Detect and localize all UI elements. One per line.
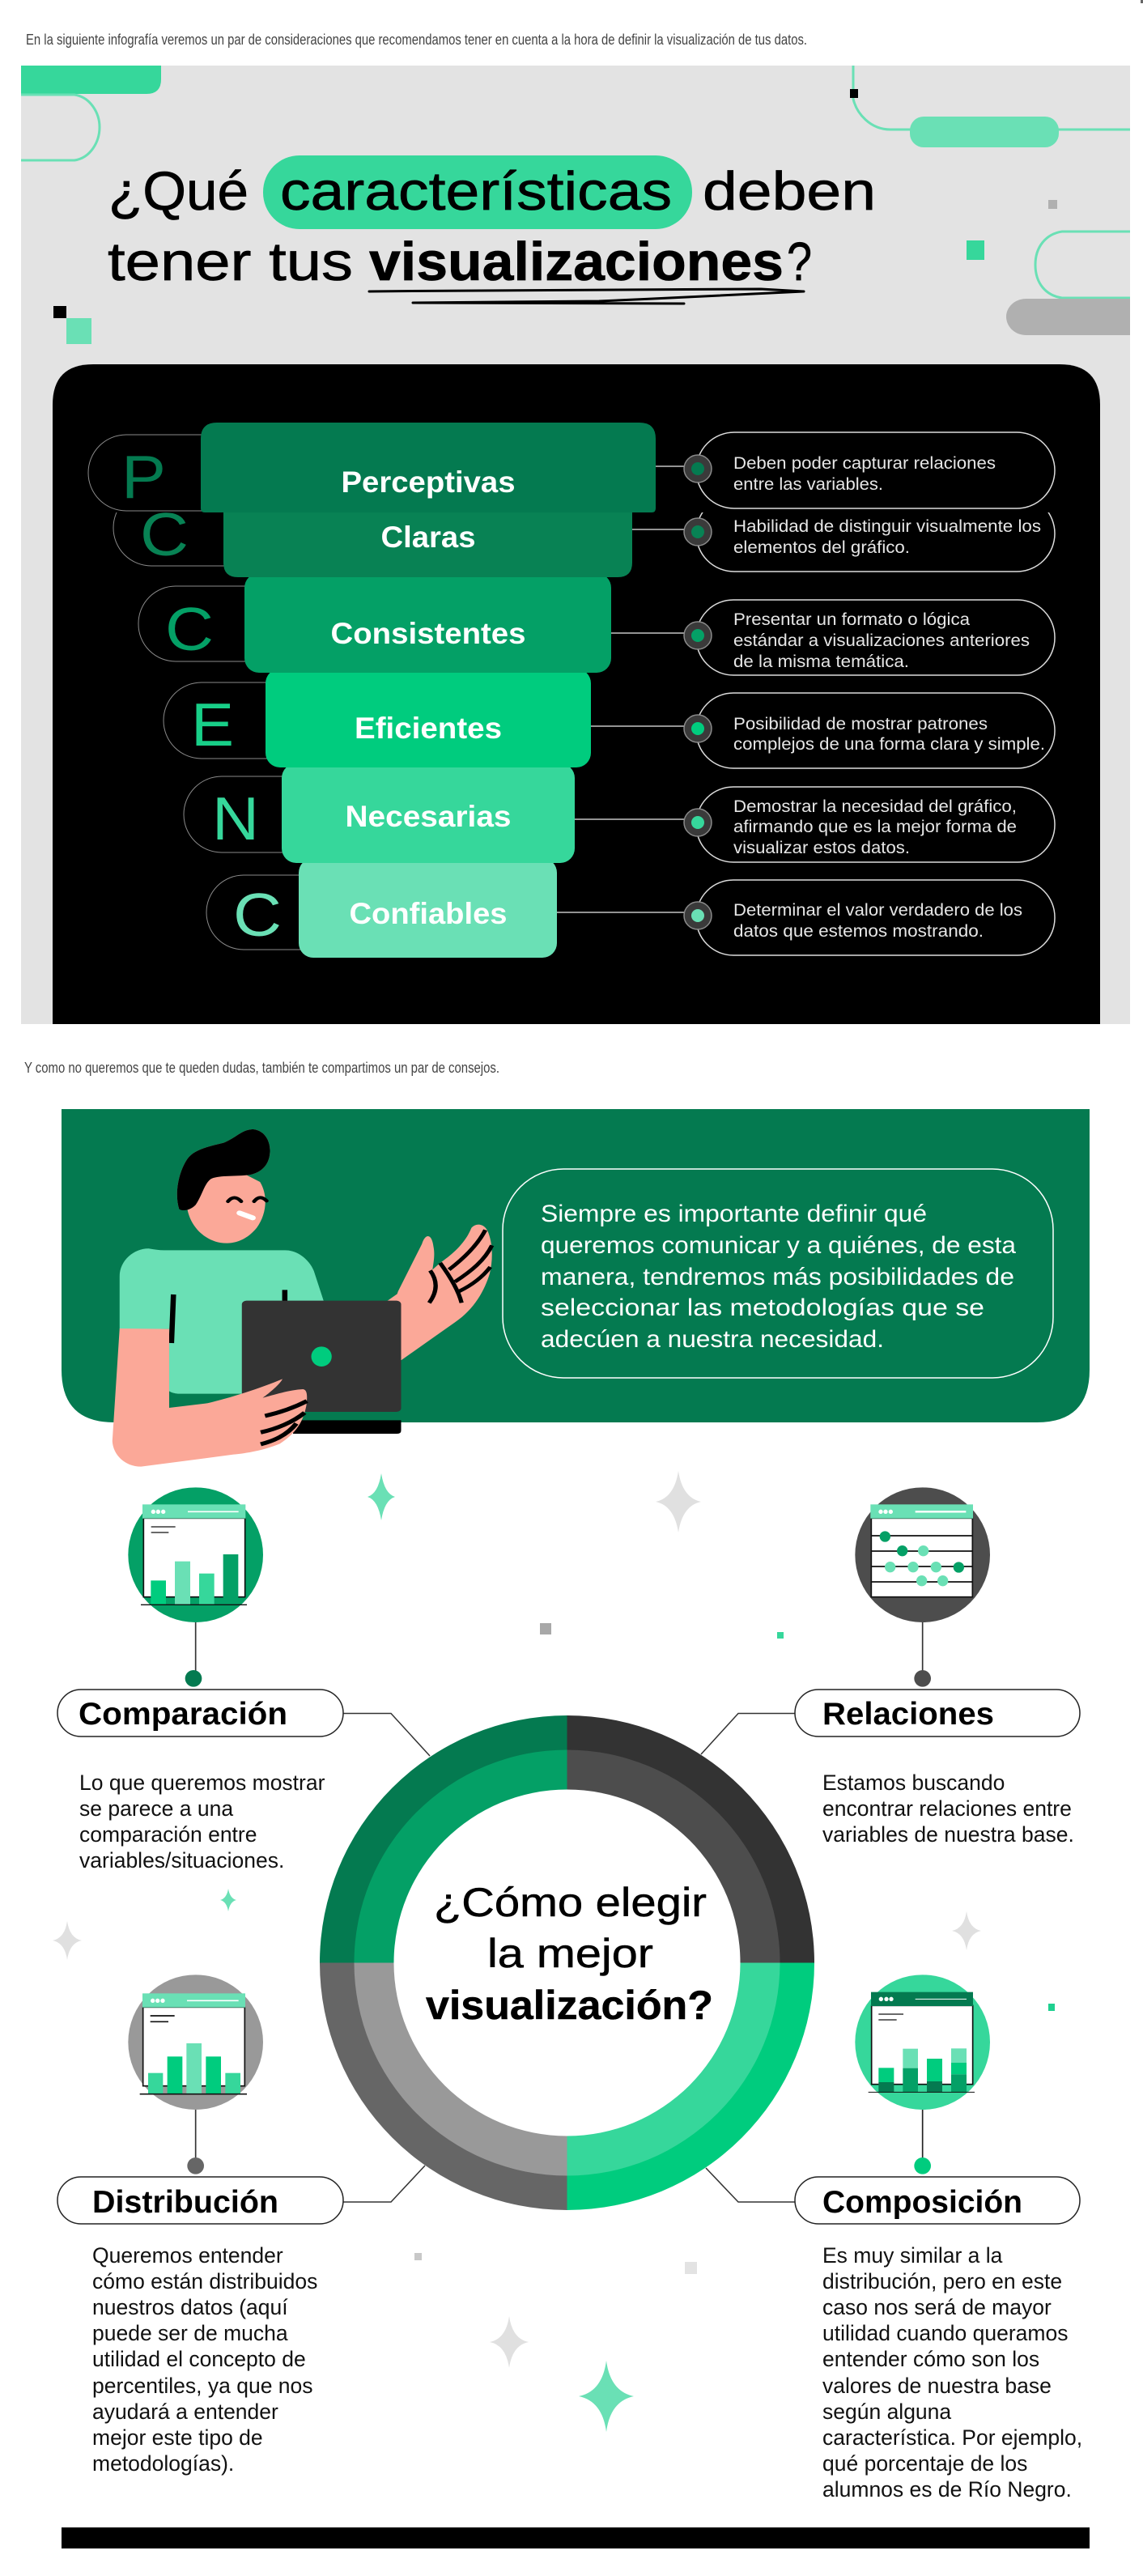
donut centre title: ¿Cómo elegir [434,1880,707,1925]
donut centre title: visualización? [426,1983,713,2028]
descriptions: afirmando que es la mejor forma de [733,817,1017,836]
descriptions: complejos de una forma clara y simple. [733,734,1045,754]
block: distribución: Queremos entender [92,2243,283,2268]
donut centre title: la mejor [487,1931,653,1976]
connector lines [557,466,688,912]
descriptions [733,453,1045,941]
block: composición: distribución, pero en este [822,2269,1062,2293]
descriptions: Deben poder capturar relaciones [733,453,996,473]
callout: advice: queremos comunicar y a quiénes, de esta [541,1232,1016,1259]
letters: N [212,784,259,852]
block: relaciones: Estamos buscando [822,1770,1005,1795]
icon: composición [855,1975,990,2174]
title: ? [787,232,812,292]
block: comparación: se parece a una [79,1796,233,1821]
block: distribución: utilidad el concepto de [92,2347,306,2371]
block: comparación [57,1690,343,1872]
letters: C [140,500,189,568]
block: distribución: percentiles, ya que nos [92,2374,313,2398]
callout: advice: Siempre es importante definir qué [541,1201,927,1227]
callout: advice: seleccionar las metodologías que se [541,1294,984,1321]
descriptions: elementos del gráfico. [733,538,910,557]
callout: advice: adecúen a nuestra necesidad. [541,1326,884,1353]
title: características [280,161,672,222]
funnel: Consistentes [330,617,526,650]
funnel: Perceptivas [342,465,515,499]
block: relaciones [795,1690,1080,1847]
funnel: Necesarias [345,800,512,833]
block: distribución: nuestros datos (aquí [92,2295,288,2319]
block: distribución: metodologías). [92,2451,234,2476]
callout: advice [503,1169,1053,1378]
block: comparación: Comparación [79,1697,287,1732]
descriptions: visualizar estos datos. [733,838,910,857]
funnel: Claras [380,521,476,554]
panel: black funnel panel [53,364,1100,1024]
block: comparación: comparación entre [79,1822,257,1847]
title: visualizaciones [369,232,784,292]
block: composición: Es muy similar a la [822,2243,1003,2268]
icon: relaciones [855,1487,990,1687]
block: composición: utilidad cuando queramos [822,2321,1068,2345]
block: composición: caso nos será de mayor [822,2295,1052,2319]
title: deben [703,161,876,222]
left letter pills [88,435,465,950]
block: composición: entender cómo son los [822,2347,1039,2371]
block: composición [795,2177,1082,2502]
descriptions: Habilidad de distinguir visualmente los [733,516,1041,536]
block: composición: qué porcentaje de los [822,2451,1027,2476]
block: distribución: Distribución [92,2185,278,2220]
descriptions: de la misma temática. [733,652,909,671]
letters [121,443,282,949]
callout: advice: manera, tendremos más posibilidades de [541,1264,1014,1290]
intro text: En la siguiente infografía veremos un par de consideraciones que recomendamos tener en cuenta a la hora de definir la visualización de tus datos. [26,32,807,48]
letters: C [233,881,282,949]
block: comparación: Lo que queremos mostrar [79,1770,325,1795]
block: distribución: ayudará a entender [92,2400,278,2424]
descriptions: Demostrar la necesidad del gráfico, [733,797,1017,816]
panel: green banner [62,1109,1090,1422]
letters: E [191,691,234,759]
descriptions: Determinar el valor verdadero de los [733,900,1022,920]
block: composición: según alguna [822,2400,951,2424]
funnel: Confiables [350,897,507,930]
title: tener tus [108,232,353,292]
block: relaciones: Relaciones [822,1697,994,1732]
leader lines [343,1713,795,2202]
descriptions: estándar a visualizaciones anteriores [733,631,1030,650]
block: composición: característica. Por ejemplo, [822,2425,1082,2450]
donut centre title [426,1880,713,2028]
descriptions: Posibilidad de mostrar patrones [733,714,988,733]
decorative sparkles [53,1471,1055,2432]
block: distribución: cómo están distribuidos [92,2269,317,2293]
block: comparación: variables/situaciones. [79,1848,284,1872]
block: distribución [57,2177,343,2476]
block: distribución: puede ser de mucha [92,2321,288,2345]
funnel: Eficientes [355,712,502,745]
nodes [684,455,712,929]
descriptions: entre las variables. [733,474,883,494]
letters: P [121,443,166,511]
icon: comparación [128,1487,263,1687]
funnel [201,423,656,958]
letters: C [165,595,214,663]
illustration: person with laptop [113,1129,492,1467]
block: composición: valores de nuestra base [822,2374,1052,2398]
block: composición: Composición [822,2185,1022,2220]
footer bar [62,2527,1090,2548]
descriptions: Presentar un formato o lógica [733,610,970,629]
block: relaciones: encontrar relaciones entre [822,1796,1072,1821]
second intro text: Y como no queremos que te queden dudas, también te compartimos un par de consejos. [24,1060,499,1076]
block: relaciones: variables de nuestra base. [822,1822,1074,1847]
title: ¿Qué [108,161,249,222]
descriptions: datos que estemos mostrando. [733,921,984,941]
panel: header background [21,66,1130,1024]
block: composición: alumnos es de Río Negro. [822,2477,1072,2502]
block: distribución: mejor este tipo de [92,2425,263,2450]
icon: distribución [128,1975,263,2174]
title [108,155,876,304]
description pills [696,432,1055,955]
donut chart [320,1715,814,2210]
